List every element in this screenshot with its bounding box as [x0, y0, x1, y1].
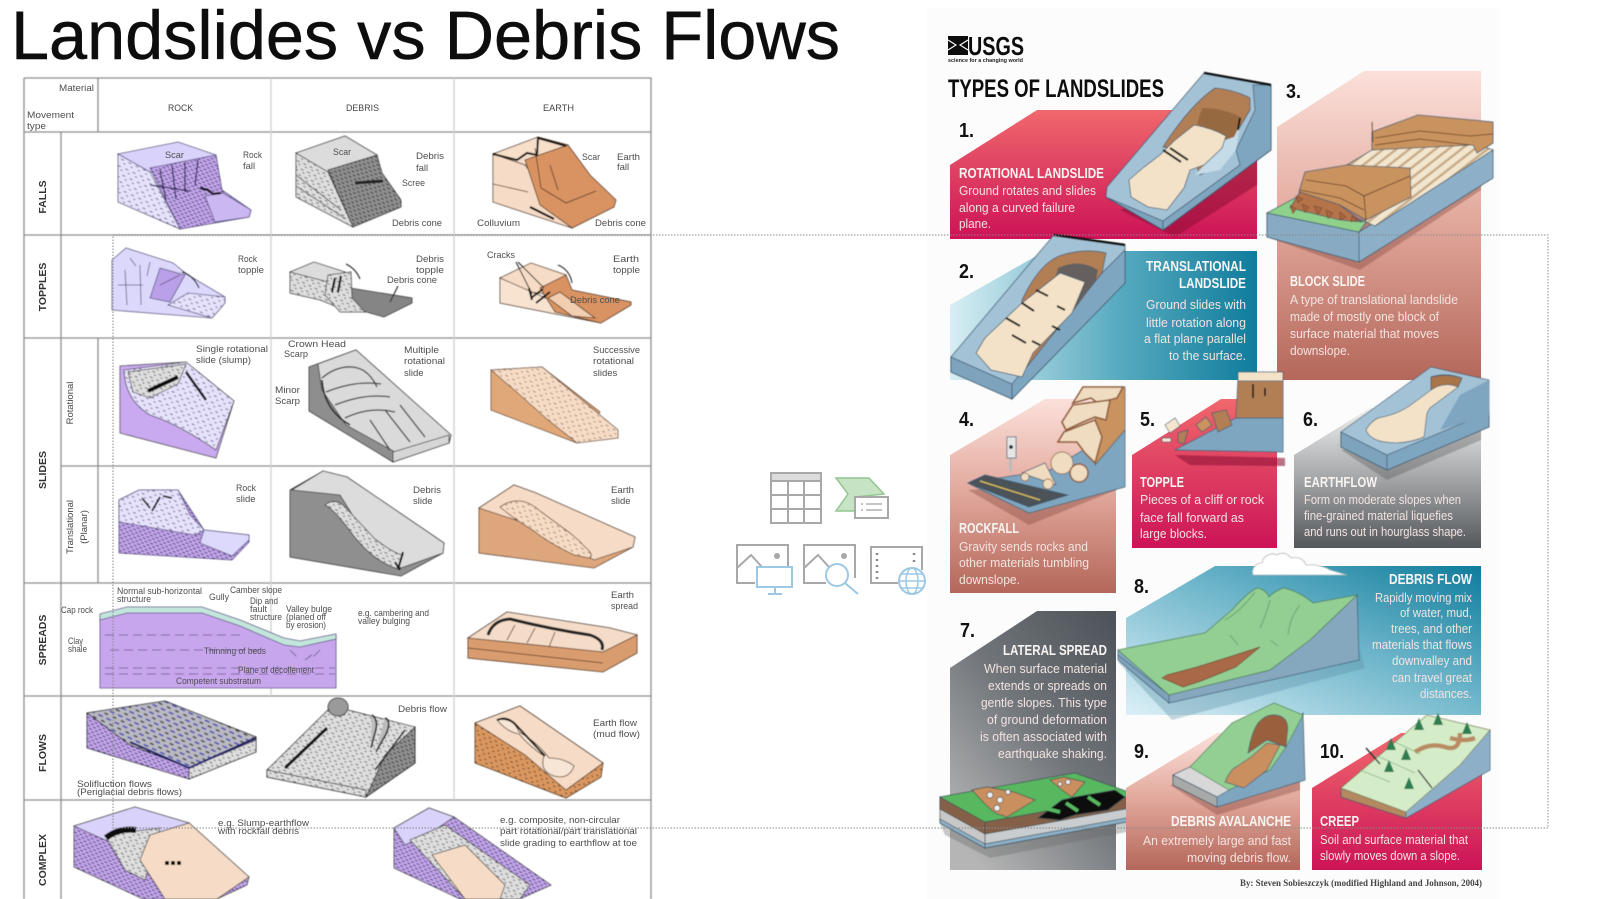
- text: rotational landslide: ROTATIONAL LANDSLIDE: [959, 166, 1104, 182]
- panel 2: translational landslide: [950, 235, 1257, 399]
- table annotations: Debris: [416, 254, 444, 265]
- text: debris flow: of water, mud,: [1400, 606, 1472, 620]
- text: earthflow: EARTHFLOW: [1304, 475, 1377, 491]
- table annotations: topple: [416, 265, 444, 276]
- icon: film with globe: [871, 547, 925, 594]
- number 3: 3.: [1286, 81, 1301, 103]
- USGS infographic: [940, 31, 1493, 889]
- block illustration 4: [968, 387, 1125, 513]
- icon: table: [771, 473, 821, 523]
- table annotations: slide (slump): [196, 355, 251, 366]
- USGS logo: USGS: [968, 31, 1024, 61]
- text: debris avalanche: DEBRIS AVALANCHE: [1171, 814, 1291, 830]
- table annotations: Debris: [416, 151, 444, 162]
- text: rotational landslide: along a curved failure: [959, 201, 1075, 215]
- text: debris flow: distances.: [1420, 687, 1472, 701]
- panel 8: debris flow: [1118, 553, 1481, 720]
- icon: picture with magnifier: [804, 545, 858, 594]
- infographic panel background: [927, 8, 1500, 899]
- table annotations: Clay: [68, 636, 83, 647]
- table annotations: Earth: [611, 590, 634, 601]
- text: creep: Soil and surface material that: [1320, 833, 1468, 847]
- row labels: COMPLEX: [37, 834, 49, 886]
- illustration: rock fall: [118, 142, 251, 229]
- text: rotational landslide: plane.: [959, 217, 991, 231]
- text: creep: slowly moves down a slope.: [1320, 849, 1460, 863]
- table annotations: slide: [611, 496, 631, 507]
- table annotations: Thinning of beds: [204, 646, 266, 657]
- row labels: TOPPLES: [37, 263, 49, 311]
- block illustration 3: [1267, 115, 1493, 262]
- illustration: earth fall: [493, 137, 616, 228]
- table annotations: e.g. Slump-earthflow: [218, 818, 309, 829]
- table annotations: Debris flow: [398, 704, 447, 715]
- table annotations: Successive: [593, 345, 640, 356]
- number 2: 2.: [959, 261, 974, 283]
- text: debris avalanche: moving debris flow.: [1187, 851, 1291, 865]
- icon group: placeholder icons: [737, 473, 925, 594]
- number 9: 9.: [1134, 741, 1149, 763]
- text: lateral spread: earthquake shaking.: [998, 747, 1107, 761]
- table annotations: shale: [68, 644, 87, 655]
- dotted selection rectangle: [113, 235, 1548, 828]
- block illustration 10: [1341, 713, 1490, 818]
- text: rockfall: Gravity sends rocks and: [959, 540, 1088, 554]
- table annotations: Scarp: [284, 349, 308, 360]
- text: debris flow: Rapidly moving mix: [1375, 591, 1473, 605]
- row labels: SLIDES: [37, 451, 49, 489]
- row labels: (Planar): [79, 510, 90, 544]
- table annotations: fall: [243, 161, 255, 172]
- table annotations: [61, 147, 646, 849]
- table annotations: Valley bulge: [286, 604, 332, 615]
- text: debris avalanche: [1143, 814, 1292, 865]
- illustration: complex composite slide: [394, 808, 551, 899]
- table headers: Material: [59, 83, 94, 94]
- table annotations: Cap rock: [61, 605, 93, 616]
- USGS logo: [948, 31, 1024, 64]
- illustration: multiple rotational slide: [309, 350, 451, 462]
- table annotations: structure: [117, 594, 151, 605]
- text: debris flow: [1372, 572, 1473, 701]
- table annotations: Normal sub-horizontal: [117, 586, 202, 597]
- text: lateral spread: LATERAL SPREAD: [1003, 643, 1107, 659]
- illustration: debris fall: [296, 136, 401, 227]
- text: translational landslide: little rotation along: [1146, 316, 1246, 330]
- table annotations: Debris cone: [387, 275, 437, 286]
- block illustration 8: [1118, 588, 1359, 703]
- table annotations: Debris cone: [392, 218, 442, 229]
- row labels: Rotational: [65, 382, 76, 424]
- block illustration 2: [951, 235, 1125, 399]
- table annotations: Multiple: [404, 345, 439, 356]
- table annotations: fall: [416, 163, 428, 174]
- text: earthflow: Form on moderate slopes when: [1304, 493, 1461, 507]
- table annotations: (mud flow): [593, 729, 640, 740]
- table headers: DEBRIS: [346, 103, 379, 114]
- table annotations: Debris cone: [595, 218, 646, 229]
- table headers: [27, 83, 574, 132]
- text: topple: TOPPLE: [1140, 475, 1184, 491]
- text: translational landslide: LANDSLIDE: [1179, 276, 1246, 292]
- table headers: type: [27, 121, 46, 132]
- table annotations: Single rotational: [196, 344, 268, 355]
- table annotations: Cracks: [487, 250, 515, 261]
- number 4: 4.: [959, 409, 974, 431]
- table annotations: Dip and: [250, 596, 278, 607]
- panel 3: block slide: [1267, 71, 1493, 380]
- table annotations: slide: [236, 494, 256, 505]
- text: topple: face fall forward as: [1140, 511, 1244, 525]
- table annotations: slide: [413, 496, 433, 507]
- text: debris flow: DEBRIS FLOW: [1389, 572, 1472, 588]
- panel 7: lateral spread: [940, 611, 1137, 870]
- table annotations: Gully: [209, 592, 229, 603]
- table annotations: (Periglacial debris flows): [77, 787, 182, 798]
- text: translational landslide: to the surface.: [1169, 349, 1246, 363]
- text: earthflow: [1304, 475, 1466, 539]
- text: rockfall: other materials tumbling: [959, 556, 1089, 570]
- table annotations: Scarp: [275, 396, 300, 407]
- panel 9: debris avalanche: [1126, 703, 1305, 870]
- table headers: ROCK: [168, 103, 194, 114]
- credit line: By: Steven Sobieszczyk (modified Highland and Johnson, 2004): [1240, 878, 1482, 889]
- text: topple: large blocks.: [1140, 527, 1207, 541]
- table annotations: slide: [404, 368, 424, 379]
- table headers: EARTH: [543, 103, 574, 114]
- table annotations: Competent substratum: [176, 676, 261, 687]
- text: topple: Pieces of a cliff or rock: [1140, 493, 1265, 507]
- table annotations: spread: [611, 601, 638, 612]
- illustration: earth spread: [468, 612, 637, 672]
- table annotations: Debris: [413, 485, 441, 496]
- illustration: debris topple: [290, 262, 412, 317]
- text: debris avalanche: An extremely large and fast: [1143, 834, 1292, 848]
- number 5: 5.: [1140, 409, 1155, 431]
- text: rockfall: ROCKFALL: [959, 521, 1019, 537]
- text: rockfall: [959, 521, 1089, 587]
- illustration: earth topple: [500, 262, 631, 323]
- block illustration 6: [1341, 367, 1489, 470]
- illustration: earth flow: [475, 706, 603, 798]
- table annotations: Crown Head: [288, 339, 346, 350]
- text: translational landslide: a flat plane parallel: [1144, 332, 1246, 346]
- table annotations: Plane of décollement: [238, 665, 314, 676]
- panel 1: rotational landslide: [950, 73, 1271, 239]
- block illustration 9: [1173, 703, 1305, 807]
- text: debris flow: can travel great: [1392, 671, 1472, 685]
- table annotations: Minor: [275, 385, 300, 396]
- text: rotational landslide: Ground rotates and slides: [959, 184, 1096, 198]
- row labels: FLOWS: [37, 734, 49, 772]
- text: lateral spread: is often associated with: [980, 730, 1107, 744]
- table headers: Movement: [27, 110, 74, 121]
- number 6: 6.: [1303, 409, 1318, 431]
- block illustration 1: [1106, 73, 1271, 230]
- table annotations: e.g. cambering and: [358, 608, 429, 619]
- illustration: debris flow: [267, 698, 415, 797]
- text: earthflow: fine-grained material liquefies: [1304, 509, 1453, 523]
- table annotations: topple: [238, 265, 264, 276]
- classification table: [24, 78, 651, 899]
- panel 6: earthflow: [1294, 367, 1489, 548]
- table annotations: Solifluction flows: [77, 779, 152, 790]
- text: block slide: BLOCK SLIDE: [1290, 274, 1365, 290]
- text: block slide: [1290, 274, 1458, 358]
- table annotations: Earth flow: [593, 718, 637, 729]
- text: debris flow: trees, and other: [1391, 622, 1472, 636]
- text: lateral spread: extends or spreads on: [988, 679, 1107, 693]
- table annotations: topple: [613, 265, 640, 276]
- text: translational landslide: [1144, 259, 1246, 363]
- panel 4: rockfall: [950, 387, 1125, 593]
- text: translational landslide: Ground slides with: [1146, 298, 1246, 312]
- row labels: Translational: [65, 500, 76, 554]
- table annotations: rotational: [593, 356, 634, 367]
- text: rotational landslide: [959, 166, 1104, 231]
- table annotations: by erosion): [286, 620, 326, 631]
- table annotations: fall: [617, 162, 629, 173]
- illustration: solifluction flows: [87, 701, 256, 779]
- text: creep: [1320, 814, 1468, 863]
- table annotations: Scar: [582, 152, 600, 163]
- table annotations: slides: [593, 368, 618, 379]
- table annotations: valley bulging: [358, 616, 410, 627]
- illustration: complex slump-earthflow: [74, 807, 249, 899]
- text: creep: CREEP: [1320, 814, 1359, 830]
- table annotations: Colluvium: [477, 218, 520, 229]
- table grid: [24, 78, 651, 899]
- table annotations: Earth: [617, 152, 640, 163]
- block illustration 7: [940, 773, 1137, 858]
- text: block slide: made of mostly one block of: [1290, 310, 1439, 324]
- table annotations: with rockfall debris: [217, 826, 299, 837]
- table annotations: Earth: [611, 485, 634, 496]
- panel 5: topple: [1132, 372, 1285, 548]
- text: block slide: A type of translational landslide: [1290, 293, 1458, 307]
- table annotations: Debris cone: [570, 295, 620, 306]
- illustration: debris slide: [290, 471, 444, 576]
- icon: green arrow with card: [836, 478, 888, 518]
- table annotations: structure: [250, 612, 282, 623]
- table annotations: fault: [250, 604, 267, 615]
- table annotations: Rock: [236, 483, 256, 494]
- table annotations: slide grading to earthflow at toe: [500, 838, 637, 849]
- number 10: 10.: [1320, 741, 1344, 763]
- panel 10: creep: [1312, 713, 1490, 870]
- text: lateral spread: When surface material: [984, 662, 1107, 676]
- illustration: single rotational slide: [120, 362, 234, 458]
- number 7: 7.: [960, 620, 975, 642]
- text: lateral spread: gentle slopes. This type: [981, 696, 1107, 710]
- icon: picture on monitor: [737, 545, 792, 594]
- text: block slide: downslope.: [1290, 344, 1350, 358]
- number 8: 8.: [1134, 576, 1149, 598]
- text: rockfall: downslope.: [959, 573, 1020, 587]
- text: topple: [1140, 475, 1265, 541]
- text: block slide: surface material that moves: [1290, 327, 1439, 341]
- table annotations: Rock: [238, 254, 257, 265]
- illustration: rock topple: [112, 248, 225, 318]
- USGS logo: science for a changing world: [948, 58, 1023, 64]
- table annotations: e.g. composite, non-circular: [500, 815, 620, 826]
- table annotations: Rock: [243, 150, 262, 161]
- heading: types of landslides: TYPES OF LANDSLIDES: [948, 75, 1164, 103]
- illustration: camber and valley bulge cross-section: [100, 607, 336, 688]
- text: translational landslide: TRANSLATIONAL: [1146, 259, 1246, 275]
- table annotations: part rotational/part translational: [500, 826, 637, 837]
- cliff illustration 5: [1162, 372, 1285, 466]
- table annotations: Scree: [402, 178, 425, 189]
- row labels: SPREADS: [37, 615, 49, 665]
- icon: cloud: [1253, 553, 1347, 575]
- table annotations: (planed off: [286, 612, 326, 623]
- table annotations: rotational: [404, 356, 445, 367]
- number 1: 1.: [959, 120, 974, 142]
- row labels: [37, 180, 90, 886]
- illustration: rock slide: [119, 490, 249, 560]
- text: lateral spread: of ground deformation: [987, 713, 1107, 727]
- table annotations: Earth: [613, 254, 639, 265]
- text: debris flow: materials that flows: [1372, 638, 1472, 652]
- table annotations: Camber slope: [230, 585, 282, 596]
- table annotations: Scar: [165, 150, 184, 161]
- table annotations: Scar: [333, 147, 351, 158]
- text: earthflow: and runs out in hourglass shape.: [1304, 525, 1466, 539]
- illustration: successive rotational slides: [491, 367, 618, 443]
- text: lateral spread: [980, 643, 1107, 761]
- text: debris flow: downvalley and: [1392, 654, 1472, 668]
- illustration: earth slide: [479, 485, 635, 568]
- row labels: FALLS: [37, 180, 49, 214]
